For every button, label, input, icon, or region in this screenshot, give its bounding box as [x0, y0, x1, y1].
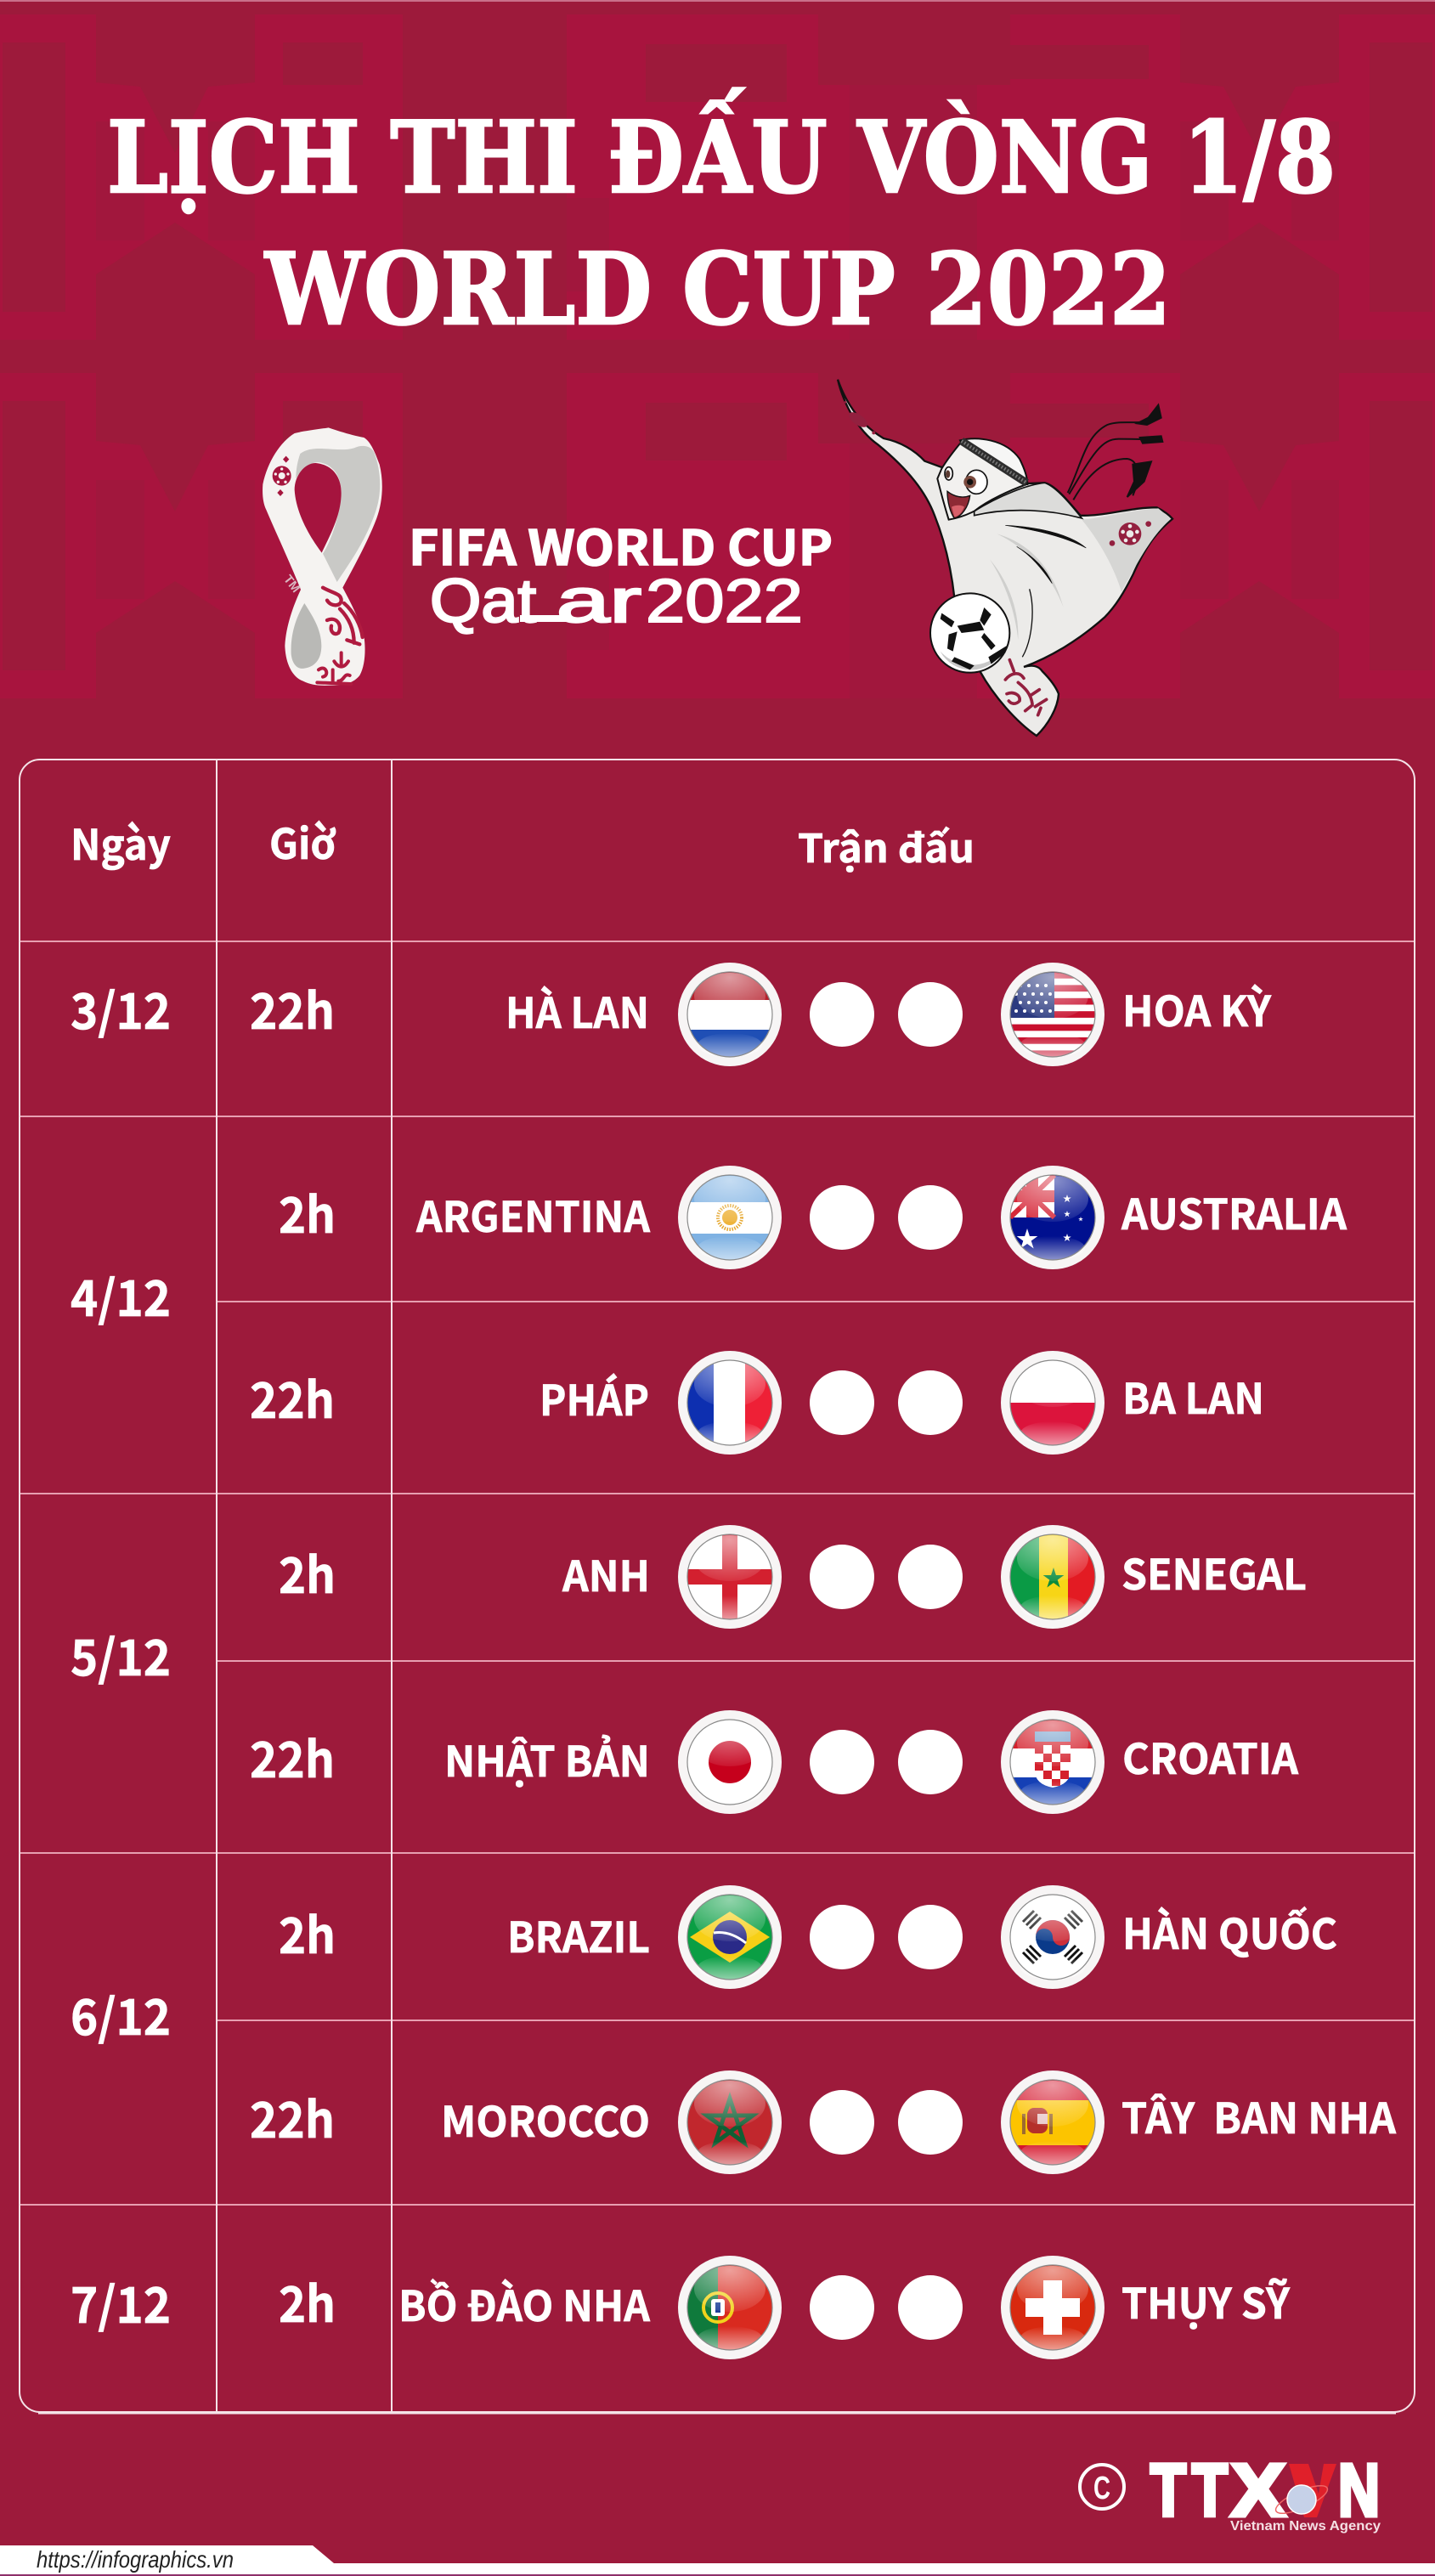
panel: schedule table [20, 760, 1415, 2413]
match times: 22h [250, 972, 335, 1043]
table header [71, 811, 975, 874]
mascot head [960, 438, 1027, 484]
flag: Japan [678, 1710, 782, 1814]
dates: 4/12 [71, 1259, 171, 1330]
flag: Poland [1001, 1351, 1104, 1455]
away team names: BA LAN [1122, 1366, 1264, 1426]
home team names: BRAZIL [507, 1905, 650, 1965]
flag: South Korea [1001, 1885, 1104, 1989]
away team names: THỤY SỸ [1121, 2271, 1291, 2331]
dates: 6/12 [71, 1978, 171, 2049]
home team names: NHẬT BẢN [444, 1729, 650, 1789]
title [107, 88, 1336, 347]
logo text: FIFA World Cup Qatar 2022 [409, 510, 833, 636]
emblem lower floral pattern [317, 652, 351, 684]
dates: 5/12 [71, 1618, 171, 1690]
title: WORLD CUP 2022 [263, 232, 1171, 347]
flag: Morocco [678, 2070, 782, 2174]
away team names: SENEGAL [1121, 1542, 1307, 1602]
home team names: BỒ ĐÀO NHA [398, 2274, 651, 2334]
match times: 2h [279, 1536, 336, 1607]
dates [71, 972, 171, 2337]
away team names: HOA KỲ [1122, 979, 1272, 1039]
flag: United States [1001, 963, 1104, 1066]
flag: France [678, 1351, 782, 1455]
home team names [398, 980, 651, 2334]
mascot ornaments [845, 401, 1151, 546]
home team names: MOROCCO [441, 2089, 650, 2149]
home team names: ARGENTINA [415, 1184, 651, 1245]
home team names: PHÁP [540, 1368, 649, 1428]
match times: 2h [279, 1896, 336, 1968]
home team names: HÀ LAN [506, 980, 649, 1041]
emblem TM mark: TM [280, 573, 302, 596]
footer strip with URL [0, 2545, 1435, 2576]
table header: Ngày [71, 812, 171, 873]
mascot tassels [1068, 405, 1162, 500]
dates: 7/12 [71, 2266, 171, 2337]
away team names: AUSTRALIA [1121, 1182, 1347, 1242]
away team names: TÂY BAN NHA [1121, 2086, 1397, 2146]
copyright symbol: C [1093, 2471, 1110, 2506]
table header: Trận đấu [798, 818, 975, 874]
away team names [1121, 979, 1397, 2331]
copyright symbol [1080, 2465, 1124, 2509]
flag: Australia [1001, 1166, 1104, 1269]
logo: TTXVN Vietnam News Agency: N [1338, 2449, 1380, 2532]
table header: Giờ [269, 811, 336, 872]
logo text: FIFA World Cup Qatar 2022: ar [556, 568, 641, 636]
logo: TTXVN Vietnam News Agency: X [1231, 2449, 1285, 2532]
mascot body [838, 380, 1172, 736]
logo: TTXVN Vietnam News Agency: T [1150, 2449, 1186, 2532]
logo: TTXVN Vietnam News Agency: Vietnam News Agency [1230, 2519, 1381, 2534]
flag: Spain [1001, 2070, 1104, 2174]
logo text: FIFA World Cup Qatar 2022: Qat [430, 568, 536, 636]
home team names: ANH [562, 1544, 650, 1604]
match times: 2h [279, 2265, 336, 2336]
dates: 3/12 [71, 972, 171, 1043]
flag: Argentina [678, 1166, 782, 1269]
match times: 22h [250, 1720, 335, 1792]
match times [250, 972, 336, 2336]
match times: 2h [279, 1176, 336, 1247]
flag: Netherlands [678, 963, 782, 1066]
away team names: HÀN QUỐC [1122, 1901, 1337, 1962]
flag: Croatia [1001, 1710, 1104, 1814]
icon: mascot La'eeb [838, 380, 1172, 736]
match times: 22h [250, 1361, 335, 1432]
logo: TTXVN Vietnam News Agency: T [1192, 2449, 1228, 2532]
logo text: FIFA World Cup Qatar 2022: FIFA WORLD CUP [409, 510, 833, 579]
flag: Senegal [1001, 1525, 1104, 1629]
flag: Portugal [678, 2256, 782, 2359]
emblem upper floral pattern [323, 588, 363, 644]
flag: Brazil [678, 1885, 782, 1989]
match times: 22h [250, 2081, 335, 2152]
flag: Switzerland [1001, 2256, 1104, 2359]
score circles [810, 982, 963, 2340]
footer strip with URL: https://infographics.vn [37, 2546, 234, 2573]
logo: TTXVN Vietnam News Agency [1150, 2449, 1381, 2534]
icon: world cup emblem [263, 427, 382, 686]
logo text: FIFA World Cup Qatar 2022: 2022 [646, 568, 803, 636]
away team names: CROATIA [1122, 1726, 1299, 1787]
mascot ball [930, 593, 1009, 673]
flag: England [678, 1525, 782, 1629]
